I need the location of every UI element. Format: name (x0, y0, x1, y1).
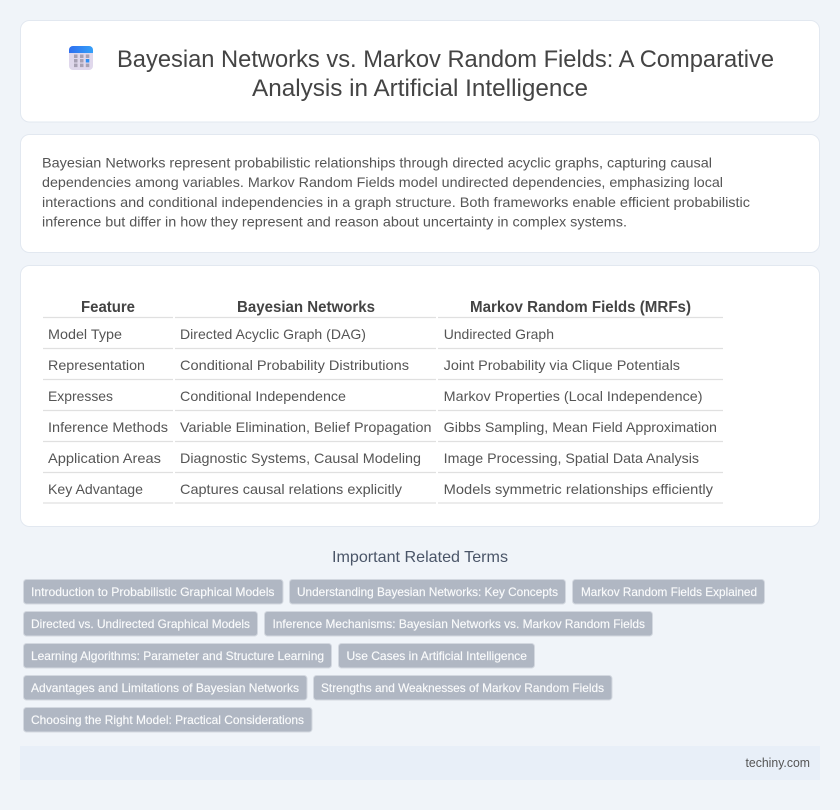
tag: Inference Mechanisms: Bayesian Networks vs. Markov Random Fields (272, 617, 645, 631)
tag (24, 580, 283, 604)
table row: application areas (48, 450, 699, 466)
text block: summary paragraph (42, 154, 750, 230)
heading: important related terms: Important Related Terms (332, 549, 508, 566)
tag (24, 612, 258, 636)
table row: model type: Directed Acyclic Graph (DAG) (180, 326, 366, 342)
table row: expresses: Expresses (48, 388, 113, 404)
table row: model type: Model Type (48, 326, 122, 342)
tag: Directed vs. Undirected Graphical Models (31, 617, 250, 631)
table row: inference methods: Variable Elimination, Belief Propagation (180, 419, 432, 435)
table row: representation: Conditional Probability Distributions (180, 357, 409, 373)
tag (314, 676, 612, 700)
table row: key advantage (48, 481, 713, 497)
tag: Strengths and Weaknesses of Markov Random Fields (321, 681, 604, 695)
tag: Markov Random Fields Explained (581, 585, 757, 599)
panel: comparison table (20, 266, 820, 526)
panel: header (20, 20, 820, 122)
tag (24, 708, 312, 732)
icon: calendar grid (69, 46, 93, 70)
table row: application areas: Application Areas (48, 450, 161, 466)
tag list: related terms (24, 580, 764, 732)
tag (24, 676, 307, 700)
title (117, 46, 774, 102)
tag: Use Cases in Artificial Intelligence (346, 649, 527, 663)
tag: Introduction to Probabilistic Graphical Models (31, 585, 274, 599)
table row: representation: Joint Probability via Clique Potentials (444, 357, 680, 373)
table row: inference methods: Inference Methods (48, 419, 168, 435)
panel: introduction (20, 134, 820, 252)
tag: Learning Algorithms: Parameter and Structure Learning (31, 649, 324, 663)
table row: key advantage: Models symmetric relationships efficiently (444, 481, 713, 497)
tag: Advantages and Limitations of Bayesian Networks (31, 681, 299, 695)
footer (20, 746, 820, 780)
footer: techiny.com (746, 756, 810, 770)
table row: representation: Representation (48, 357, 145, 373)
table row: application areas: Diagnostic Systems, Causal Modeling (180, 450, 421, 466)
table row: model type: Undirected Graph (444, 326, 554, 342)
table row: representation (48, 357, 680, 373)
table row: inference methods: Gibbs Sampling, Mean Field Approximation (444, 419, 717, 435)
table row: key advantage: Key Advantage (48, 481, 143, 497)
text block: summary paragraph: interactions and conditional independencies in a graph structure. Both frameworks enable efficient probabilistic (42, 194, 750, 210)
table row: expresses: Markov Properties (Local Independence) (444, 388, 702, 404)
table header row: Feature (81, 299, 135, 316)
tag (24, 644, 332, 668)
title: Bayesian Networks vs. Markov Random Fields: A Comparative (117, 46, 774, 73)
table header row: Markov Random Fields (MRFs) (470, 299, 691, 316)
tag: Choosing the Right Model: Practical Considerations (31, 713, 304, 727)
tag (264, 612, 652, 636)
title: Analysis in Artificial Intelligence (252, 75, 588, 102)
tag (338, 644, 534, 668)
text block: summary paragraph: dependencies among variables. Markov Random Fields model undirected dependencies, emphasizing local (42, 174, 723, 190)
table row: expresses (48, 388, 702, 404)
table header row: Bayesian Networks (237, 299, 375, 316)
text block: summary paragraph: inference but differ in how they represent and reason about uncertainty in complex systems. (42, 214, 627, 230)
table header row (81, 299, 691, 316)
table row: expresses: Conditional Independence (180, 388, 346, 404)
table row: model type (48, 326, 554, 342)
tag: Understanding Bayesian Networks: Key Concepts (297, 585, 558, 599)
table row: inference methods (48, 419, 717, 435)
tag (290, 580, 566, 604)
table row: key advantage: Captures causal relations explicitly (180, 481, 402, 497)
tag (572, 580, 764, 604)
text block: summary paragraph: Bayesian Networks represent probabilistic relationships through directed acyclic graphs, capturing causal (42, 154, 712, 170)
table row: application areas: Image Processing, Spatial Data Analysis (444, 450, 699, 466)
